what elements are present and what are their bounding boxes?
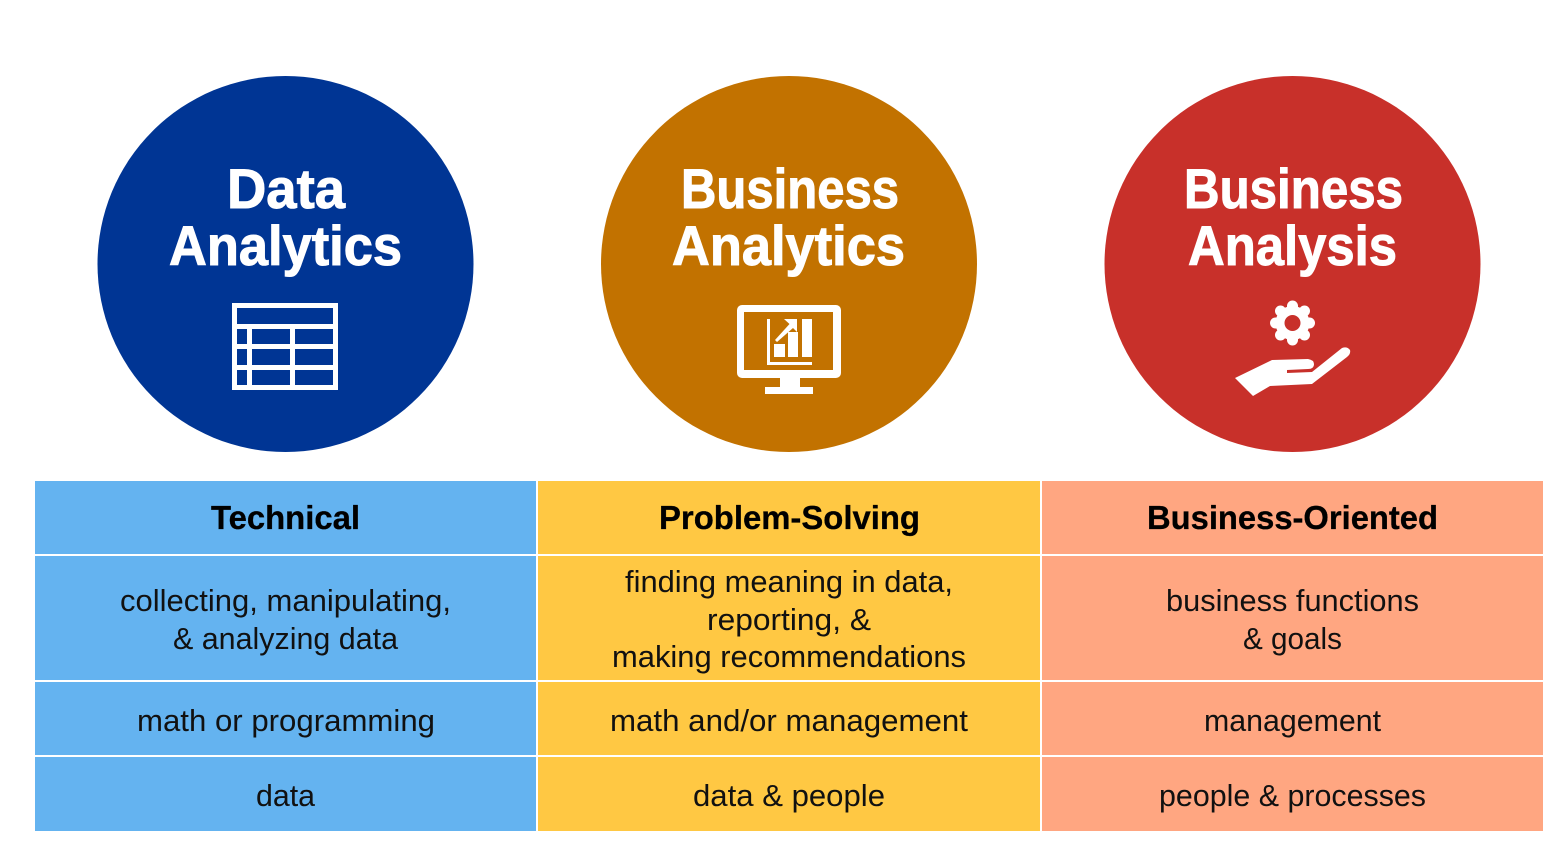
- title: data analytics: Analytics: [169, 214, 402, 277]
- column: technical: data: [256, 778, 316, 813]
- column: problem-solving: making recommendations: [612, 639, 966, 674]
- icon: spreadsheet table: [232, 303, 338, 390]
- column: business-oriented: business functions: [1166, 583, 1419, 618]
- panel: data analytics circle: [98, 76, 474, 452]
- title: business analytics: Analytics: [672, 214, 905, 277]
- column: business-oriented: [1042, 481, 1543, 831]
- column: problem-solving: math and/or management: [610, 703, 968, 738]
- title: business analytics: Business: [681, 157, 899, 220]
- title: data analytics: [169, 157, 402, 277]
- column: problem-solving: Problem-Solving: [659, 499, 920, 536]
- column: technical: Technical: [211, 499, 360, 536]
- panel: business analytics circle: [601, 76, 977, 452]
- title: business analysis: Business: [1184, 157, 1403, 220]
- title: business analysis: [1184, 157, 1403, 277]
- column: business-oriented: people & processes: [1159, 778, 1426, 813]
- title: data analytics: Data: [227, 157, 346, 220]
- column: technical: math or programming: [137, 703, 435, 738]
- title: business analytics: [672, 157, 905, 277]
- column: problem-solving: data & people: [693, 778, 885, 813]
- column: problem-solving: finding meaning in data,: [625, 564, 953, 599]
- column: problem-solving: [538, 481, 1040, 831]
- title: business analysis: Analysis: [1188, 214, 1397, 277]
- column: business-oriented: management: [1204, 703, 1381, 738]
- column: problem-solving: reporting, &: [707, 602, 871, 637]
- column: technical: & analyzing data: [173, 621, 399, 656]
- column: technical: [35, 481, 536, 831]
- column: business-oriented: & goals: [1243, 621, 1342, 656]
- column: business-oriented: Business-Oriented: [1147, 499, 1438, 536]
- icon: hand holding gear: [1235, 306, 1350, 396]
- panel: business analysis circle: [1104, 76, 1480, 452]
- table: comparison: [35, 481, 1543, 831]
- column: technical: collecting, manipulating,: [120, 583, 451, 618]
- icon: monitor with chart: [737, 305, 841, 394]
